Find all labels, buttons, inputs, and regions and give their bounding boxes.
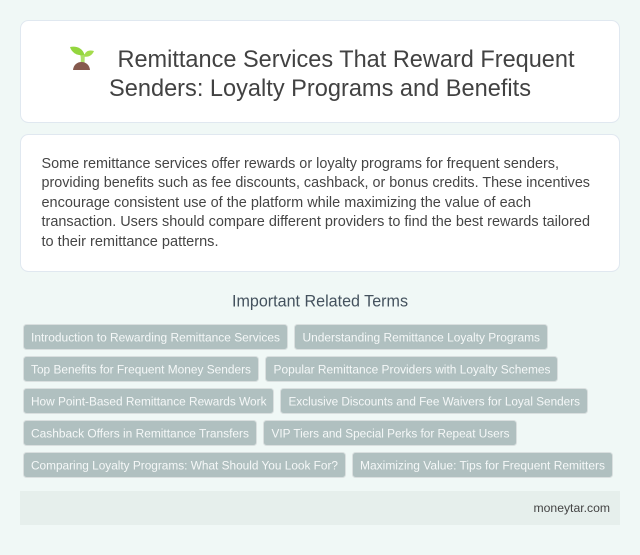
tag: Introduction to Rewarding Remittance Services [31,330,280,344]
tag [280,388,588,414]
tag: Top Benefits for Frequent Money Senders [31,362,251,376]
tag: Comparing Loyalty Programs: What Should You Look For? [31,458,338,472]
tag [24,388,274,414]
footer [20,491,620,525]
icon: sprout [70,47,94,70]
tag: Maximizing Value: Tips for Frequent Remitters [360,458,605,472]
tag [352,452,612,478]
tag: How Point-Based Remittance Rewards Work [31,394,267,408]
text block: description: transaction. Users should compare different providers to find the best rewards tailored [42,213,590,230]
tag: Popular Remittance Providers with Loyalty Schemes [274,362,550,376]
tag [24,420,256,446]
heading: important related terms: Important Related Terms [232,292,408,310]
text block: description: encourage consistent use of the platform while maximizing the value of each [42,194,531,211]
tag [264,420,516,446]
title [109,46,575,102]
text block: description: providing benefits such as fee discounts, cashback, or bonus credits. These incentives [42,174,590,191]
tag [294,324,548,350]
tag group: related terms [24,324,612,478]
tag: Understanding Remittance Loyalty Programs [302,330,540,344]
footer source text: moneytar.com [534,501,610,515]
title: Senders: Loyalty Programs and Benefits [109,75,531,102]
title: Remittance Services That Reward Frequent [118,46,575,73]
text block: description [42,155,590,250]
panel: introduction text [20,134,620,272]
text block: description: to their remittance patterns. [42,233,218,250]
tag: VIP Tiers and Special Perks for Repeat Users [272,426,510,440]
panel: title card [20,20,620,122]
tag [24,356,258,382]
tag [24,324,288,350]
tag [24,452,346,478]
tag [266,356,558,382]
text block: description: Some remittance services offer rewards or loyalty programs for frequent senders, [42,155,559,172]
tag: Cashback Offers in Remittance Transfers [31,426,249,440]
tag: Exclusive Discounts and Fee Waivers for Loyal Senders [288,394,580,408]
